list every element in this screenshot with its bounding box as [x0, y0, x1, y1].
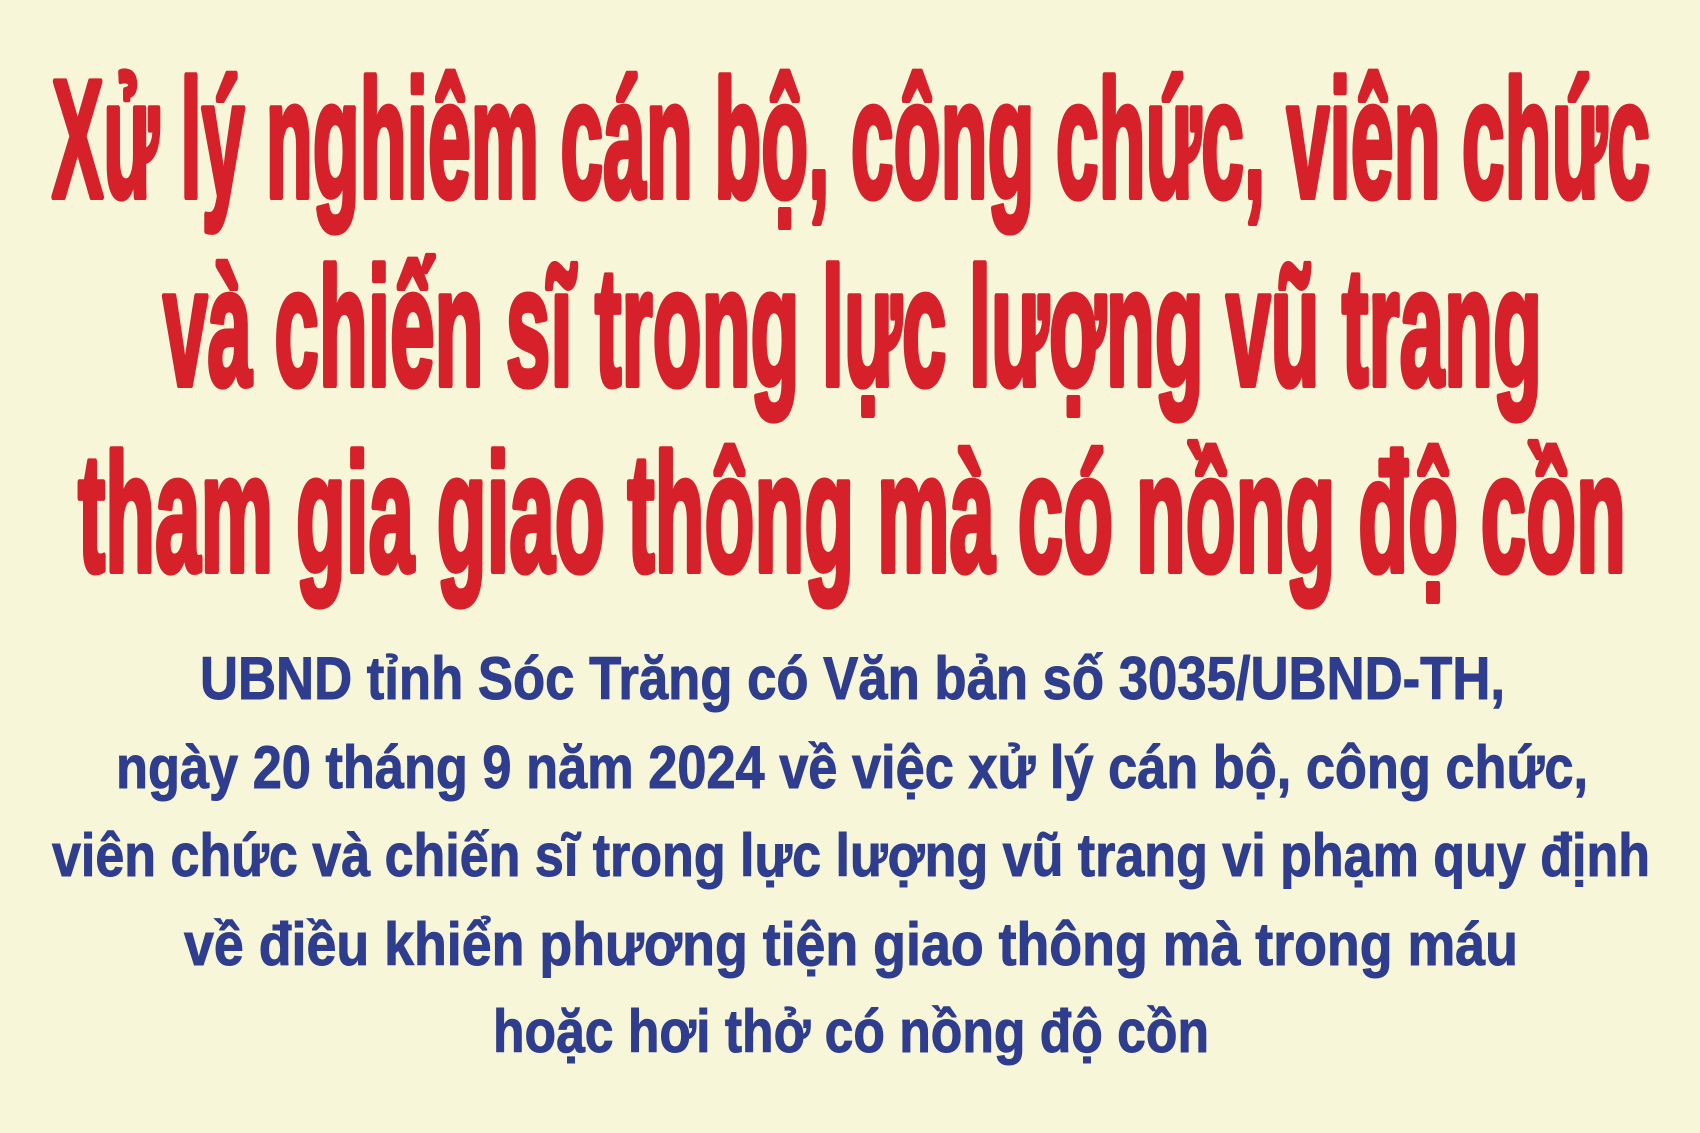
- title: [52, 45, 1650, 607]
- subtitle text block: hoặc hơi thở có nồng độ cồn: [493, 998, 1209, 1065]
- subtitle text block: về điều khiển phương tiện giao thông mà trong máu: [184, 911, 1518, 978]
- subtitle text block: [52, 645, 1650, 1065]
- subtitle text block: UBND tỉnh Sóc Trăng có Văn bản số 3035/UBND-TH,: [200, 645, 1505, 712]
